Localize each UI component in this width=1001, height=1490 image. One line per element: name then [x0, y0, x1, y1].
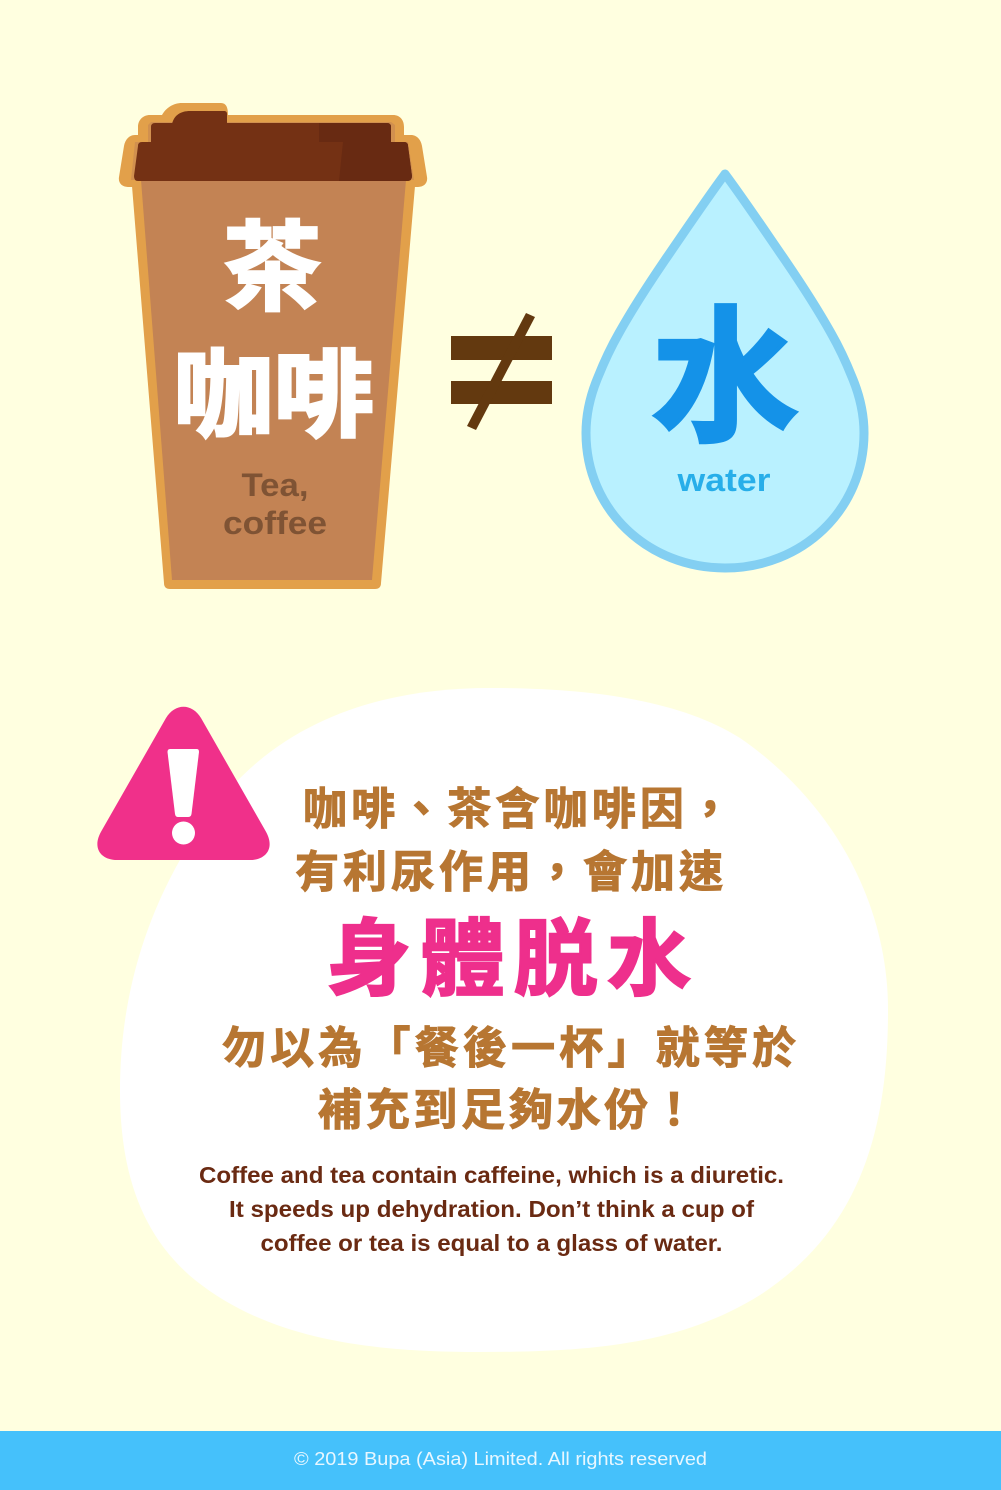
message: English explanation: Coffee and tea contain caffeine, which is a diuretic.: [199, 1162, 784, 1188]
drop text: Chinese water: 水: [652, 297, 798, 460]
message: Chinese caffeine text: 有利尿作用，會加速: [295, 848, 723, 897]
drop text: English water: water: [676, 462, 770, 498]
footer bar: © 2019 Bupa (Asia) Limited. All rights reserved: [294, 1449, 707, 1469]
message: Chinese caffeine text: 咖啡、茶含咖啡因，: [303, 785, 732, 834]
cup text: Chinese tea: 茶: [224, 214, 321, 323]
message: Chinese warning text: 補充到足夠水份！: [318, 1086, 696, 1135]
footer bar: [0, 1431, 1001, 1490]
cup text: English tea, coffee: Tea,: [242, 467, 308, 503]
icon: not equal sign: [451, 313, 552, 430]
icon: water drop: [586, 174, 864, 568]
cup text: English tea, coffee: coffee: [223, 505, 327, 541]
message: Chinese caffeine text: [295, 785, 732, 897]
message: Chinese warning text: [222, 1024, 796, 1135]
message: English explanation: It speeds up dehydration. Don’t think a cup of: [229, 1196, 754, 1222]
cup text: Chinese coffee: 咖啡: [174, 344, 374, 450]
panel: white blob: [120, 688, 888, 1352]
heading: dehydration: 身體脱水: [327, 912, 691, 1006]
message: English explanation: [199, 1162, 784, 1256]
message: English explanation: coffee or tea is equal to a glass of water.: [260, 1230, 722, 1256]
cup text: English tea, coffee: [223, 467, 327, 541]
icon: warning triangle: [97, 707, 270, 860]
message: Chinese warning text: 勿以為「餐後一杯」就等於: [222, 1024, 796, 1073]
icon: coffee cup: [119, 103, 427, 589]
